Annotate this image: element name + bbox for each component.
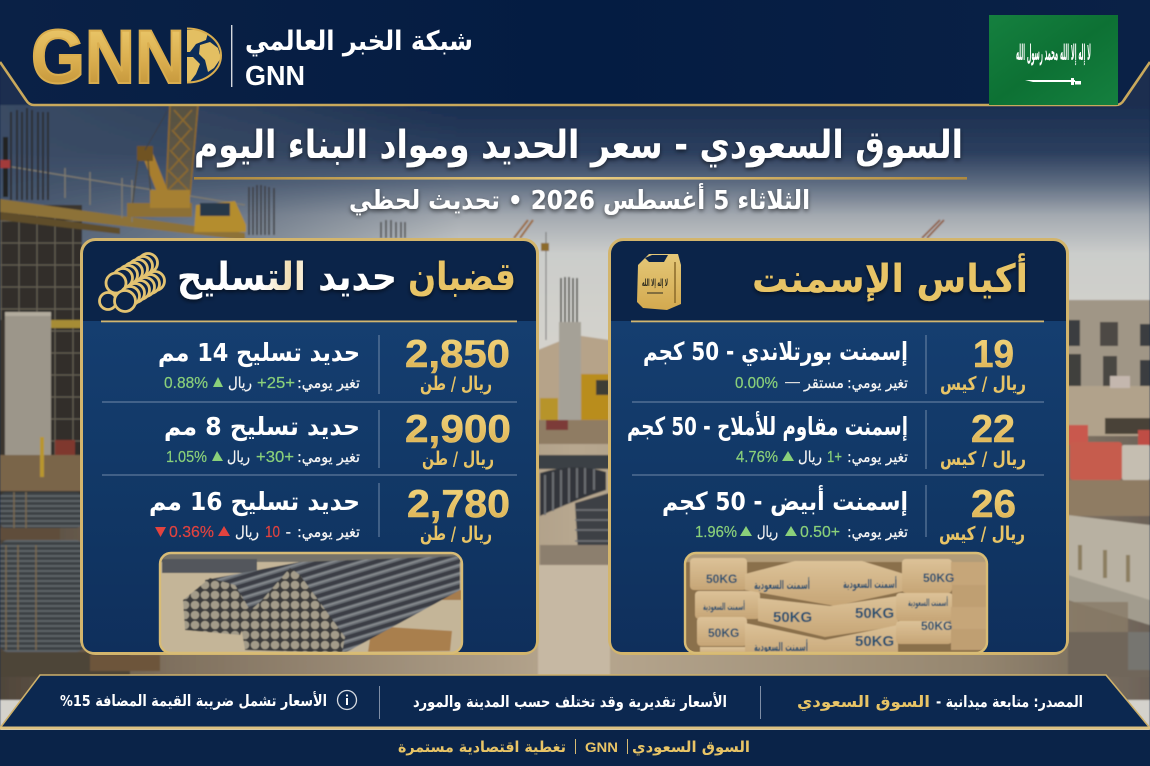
row: Portland cement: ريال / كيس [940,373,1026,395]
row: rebar 14 mm: +25+ [257,375,295,392]
note: VAT: الأسعار تشمل ضريبة القيمة المضافة 15% [60,691,327,710]
logo: GNN gold wordmark with globe [32,28,222,84]
row: salt-resistant cement [627,408,1026,470]
photo: cement bags: أسمنت السعودية [908,596,948,609]
photo: cement bags: 50KG [855,633,894,650]
note: source [797,693,1083,712]
logo: GNN gold wordmark with globe: GNN [31,15,185,100]
row dividers [632,335,1044,537]
photo: cement bags: أسمنت السعودية [754,639,808,655]
row: rebar 16 mm: ريال / طن [420,523,492,545]
logo divider [231,25,232,87]
footer notes band [0,675,1150,730]
bottom strip [0,730,1150,766]
row: rebar 14 mm: حديد تسليح 14 مم [158,338,360,368]
row: white cement: ريال / كيس [939,523,1025,545]
row: rebar 16 mm: ريال [235,523,259,541]
row: white cement [662,483,1025,545]
photo: cement bags: 50KG [706,572,737,586]
row: Portland cement: 19 [973,333,1014,376]
row: salt-resistant cement: ريال / كيس [940,448,1026,470]
panel heading: cement: أكياس الإسمنت [752,253,1028,302]
row: rebar 8 mm [164,408,511,470]
note: source: المصدر: متابعة ميدانية - [936,693,1083,711]
tagline: السوق السعودي [632,738,750,757]
note: prices approximate: الأسعار تقديرية وقد تختلف حسب المدينة والمورد [413,692,727,711]
row: rebar 16 mm: 0.36% [169,524,214,541]
row: rebar 14 mm: 2,850 [405,333,510,376]
photo: cement bags: 50KG [921,619,952,633]
row: white cement: 26 [971,483,1016,526]
row: rebar 16 mm: 10 [265,524,280,541]
note divider [379,686,380,719]
row: white cement: 0.50+ [800,524,840,541]
icon: info [338,690,356,710]
row: rebar 8 mm: +30+ [256,449,294,466]
row: Portland cement: مستقر [803,374,844,392]
row: rebar 8 mm: ريال / طن [422,448,494,470]
tagline: تغطية اقتصادية مستمرة [398,738,566,756]
photo: cement bags: 50KG [773,609,812,626]
icon: rebar bundle [100,254,164,312]
panel: cement prices [610,240,1068,660]
row: salt-resistant cement: تغير يومي: [847,448,908,467]
row: rebar 16 mm: - [286,523,291,541]
note divider [760,686,761,719]
photo: cement bags [685,553,987,660]
icon: cement bag [637,254,681,310]
row: salt-resistant cement: 4.76% [736,449,778,466]
row: rebar 8 mm: تغير يومي: [297,448,360,467]
row: salt-resistant cement: إسمنت مقاوم للأملاح - 50 كجم [627,411,908,442]
row: rebar 8 mm: 1.05% [166,449,207,466]
icon: cement bag: لا إله إلا الله [642,278,668,289]
network name [245,26,473,91]
network name: GNN [245,60,305,91]
header band [0,0,1150,105]
row: white cement: إسمنت أبيض - 50 كجم [662,485,908,516]
note: source: السوق السعودي [797,693,930,712]
panel: rebar prices [82,240,538,654]
photo: cement bags: 50KG [923,571,954,585]
icon: Saudi flag [989,15,1118,105]
panel heading: rebar: قضبان [408,255,516,300]
row: rebar 8 mm: ريال [227,448,250,466]
row: salt-resistant cement: 1+ [827,449,842,466]
row: rebar 14 mm: ريال [228,374,252,392]
photo: cement bags: أسمنت السعودية [843,576,897,592]
title underline [194,177,967,180]
subtitle: date: الثلاثاء 5 أغسطس 2026 • تحديث لحظي [349,183,810,216]
row: salt-resistant cement: ريال [798,448,822,466]
row: rebar 16 mm: 2,780 [407,483,510,526]
tagline [398,738,750,757]
row: rebar 8 mm: 2,900 [405,408,511,451]
photo: cement bags: أسمنت السعودية [754,577,810,593]
row: rebar 14 mm: ريال / طن [420,373,492,395]
row: salt-resistant cement: 22 [971,408,1015,451]
photo: rebar stack [160,553,462,653]
row: Portland cement [643,333,1026,395]
row: rebar 16 mm [149,483,510,545]
row: rebar 16 mm: تغير يومي: [297,523,360,542]
row: rebar 8 mm: حديد تسليح 8 مم [164,412,360,442]
network name: شبكة الخبر العالمي [245,26,473,57]
row: white cement: 1.96% [695,524,737,541]
heading divider [631,320,1044,322]
photo: cement bags: أسمنت السعودية [703,600,745,613]
tagline: GNN [585,739,618,755]
row: rebar 14 mm: تغير يومي: [297,374,360,393]
row: white cement: ريال [757,523,778,541]
row: rebar 14 mm: 0.88% [164,375,208,392]
row: white cement: تغير يومي: [847,523,908,542]
row: rebar 14 mm [158,333,510,395]
photo: cement bags: 50KG [708,626,739,640]
heading divider [101,320,517,322]
row: Portland cement: 0.00% [735,375,778,392]
row: Portland cement: إسمنت بورتلاندي - 50 كجم [643,337,908,367]
title: السوق السعودي - سعر الحديد ومواد البناء اليوم [194,123,963,168]
row: Portland cement: تغير يومي: [847,374,908,393]
photo: cement bags: 50KG [855,605,894,622]
panel heading: rebar: حديد التسليح [177,255,397,300]
row: rebar 16 mm: حديد تسليح 16 مم [149,487,360,517]
row dividers [102,335,517,537]
